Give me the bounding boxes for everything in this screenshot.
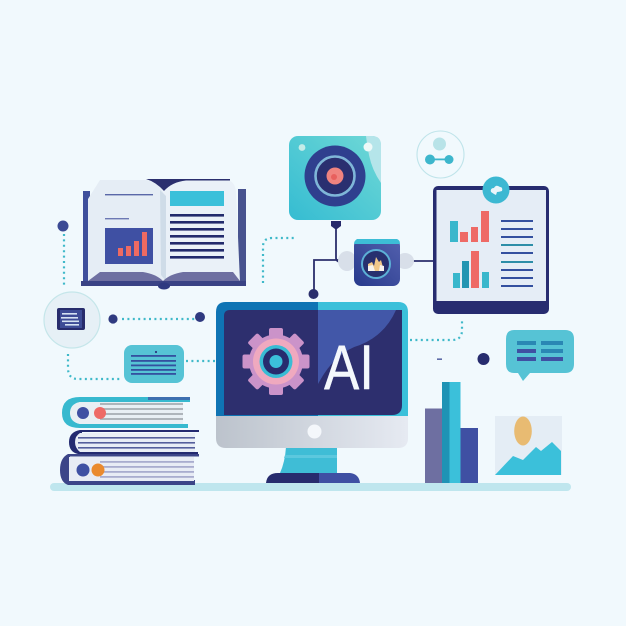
middle book	[69, 430, 199, 454]
speech bubble	[506, 330, 574, 381]
tablet badge	[482, 176, 510, 204]
plug	[331, 221, 341, 229]
book right page text lines	[170, 214, 224, 259]
top book	[62, 397, 190, 428]
tablet bottom bar chart	[453, 251, 489, 288]
stack of books	[60, 397, 199, 485]
connector lines	[314, 222, 433, 292]
node: left of book	[58, 220, 68, 232]
monitor	[216, 302, 408, 448]
nodes: dotted link	[108, 312, 205, 324]
book right page header	[170, 191, 224, 206]
monitor label: AI	[324, 333, 374, 403]
tablet text lines	[501, 220, 533, 287]
icon: network circle	[417, 131, 464, 178]
camera lens tile	[289, 136, 381, 220]
bottom book	[60, 454, 199, 485]
icon: document circle	[44, 292, 100, 348]
message card	[124, 345, 184, 383]
open book	[81, 179, 246, 290]
chip with cloud	[338, 239, 414, 286]
bar chart	[425, 382, 478, 483]
tablet with charts	[433, 176, 549, 314]
book page chart	[105, 228, 153, 264]
ground line	[50, 483, 571, 491]
book base	[81, 281, 246, 286]
small dash and node	[437, 358, 442, 360]
book left page text lines	[105, 194, 153, 195]
node above monitor	[308, 289, 318, 299]
picture card	[495, 416, 562, 475]
stand	[266, 447, 360, 483]
tablet top bar chart	[450, 211, 489, 242]
gear icon	[242, 328, 310, 395]
dotted connectors	[64, 234, 462, 379]
